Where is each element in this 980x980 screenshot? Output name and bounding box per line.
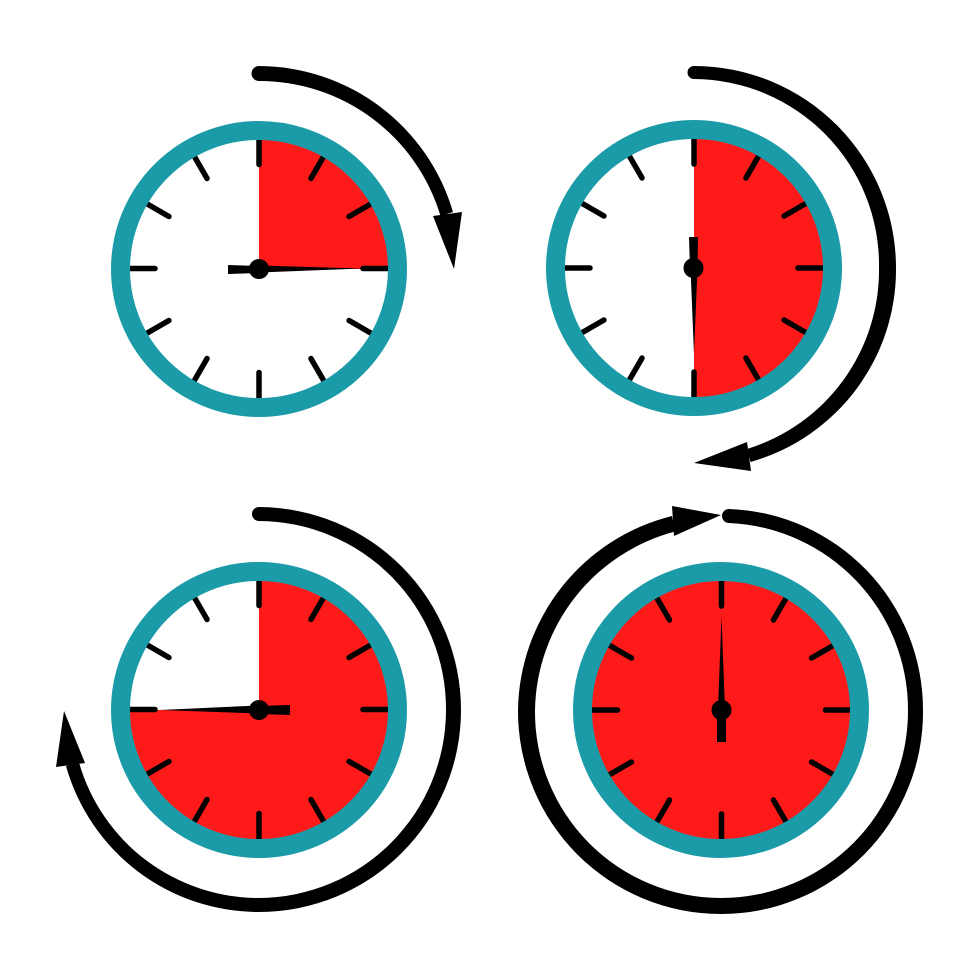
red sector: 15 minutes (259, 139, 389, 269)
red sector: 45 minutes (129, 580, 389, 840)
arrow: half turn (688, 66, 896, 471)
clock face (129, 139, 389, 399)
clock face (564, 138, 824, 398)
clock hands (228, 259, 362, 279)
tick marks (590, 578, 854, 842)
clock hands (712, 616, 732, 742)
clock: full hour elapsed (582, 572, 860, 848)
clock hands (160, 700, 290, 720)
clock: three quarters elapsed (120, 572, 398, 848)
tick marks (127, 578, 391, 842)
tick marks (562, 136, 826, 400)
teal ring (582, 572, 860, 848)
arrow: quarter turn (252, 66, 462, 269)
clock: quarter elapsed (120, 130, 398, 408)
teal ring (120, 130, 398, 408)
teal ring (556, 130, 832, 406)
red clock face (591, 580, 851, 840)
clock hands (684, 237, 704, 354)
tick marks (127, 136, 391, 400)
arrow: three-quarter turn (56, 507, 461, 912)
clock face (129, 580, 389, 840)
arrow: full turn (518, 506, 923, 914)
red sector: 30 minutes (694, 138, 824, 398)
clock: half elapsed (556, 130, 832, 406)
teal ring (120, 572, 398, 848)
